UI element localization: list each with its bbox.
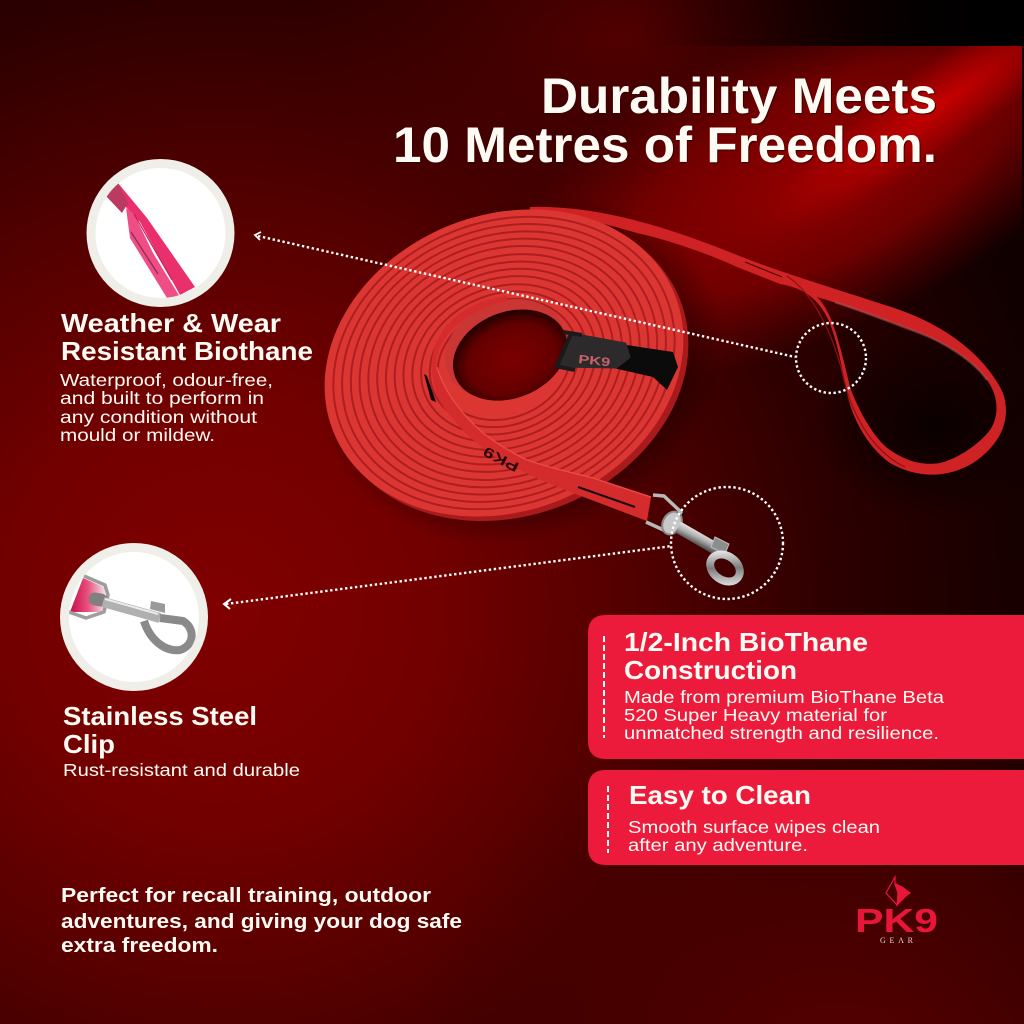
gaps between coil windings	[424, 374, 445, 402]
description: unmatched strength and resilience.	[624, 723, 939, 743]
closing statement: adventures, and giving your dog safe	[61, 911, 462, 933]
velcro strap with PK9 tab	[555, 332, 678, 390]
description	[60, 370, 273, 445]
description: any condition without	[60, 407, 257, 427]
coil shadow	[266, 136, 778, 604]
leash strand to clip: PK9	[480, 443, 521, 475]
description: after any adventure.	[628, 835, 808, 855]
heading: Stainless Steel	[63, 701, 257, 731]
description: Rust-resistant and durable	[63, 760, 300, 780]
description: and built to perform in	[60, 388, 264, 408]
coil centre hole	[430, 282, 582, 419]
logo: PK9 Gear: PK9	[855, 902, 938, 939]
description: Made from premium BioThane Beta	[624, 687, 944, 707]
title: 10 Metres of Freedom.	[393, 117, 937, 173]
heading: 1/2-Inch BioThane	[624, 627, 868, 657]
velcro strap with PK9 tab: PK9	[578, 352, 611, 369]
icon: biothane close-up photo	[86, 159, 234, 307]
title: Durability Meets	[541, 68, 937, 124]
metal snap clip	[646, 495, 745, 587]
description	[628, 817, 880, 855]
description: Smooth surface wipes clean	[628, 817, 880, 837]
description	[624, 687, 944, 743]
heading: Easy to Clean	[629, 780, 811, 810]
closing statement: extra freedom.	[61, 935, 218, 957]
logo: PK9 Gear	[855, 877, 938, 945]
icon: clip close-up photo	[60, 543, 208, 691]
title	[393, 68, 937, 173]
panel: easy to clean card	[588, 770, 1024, 865]
description: Waterproof, odour-free,	[60, 370, 273, 390]
description: 520 Super Heavy material for	[624, 705, 887, 725]
heading	[61, 308, 313, 366]
leash strand to clip	[432, 296, 651, 521]
heading: Resistant Biothane	[61, 336, 313, 366]
leash tail and hand loop	[530, 207, 1006, 475]
heading: Weather & Wear	[61, 308, 281, 338]
closing statement	[61, 885, 462, 957]
logo: PK9 Gear: GEAR	[880, 936, 914, 945]
heading	[624, 627, 868, 685]
product: coiled red leash	[266, 136, 1006, 604]
icon: dog head	[886, 877, 910, 905]
coil rings	[278, 156, 735, 575]
closing statement: Perfect for recall training, outdoor	[61, 885, 431, 907]
panel: weather resistant biothane	[60, 159, 313, 445]
description: mould or mildew.	[60, 425, 215, 445]
panel: biothane construction card	[588, 615, 1024, 759]
heading	[63, 701, 257, 759]
dotted callout: clip detail	[224, 487, 783, 609]
dotted callout: biothane detail	[255, 232, 866, 393]
panel: stainless steel clip	[60, 543, 300, 780]
heading: Clip	[63, 729, 115, 759]
heading: Construction	[624, 655, 797, 685]
